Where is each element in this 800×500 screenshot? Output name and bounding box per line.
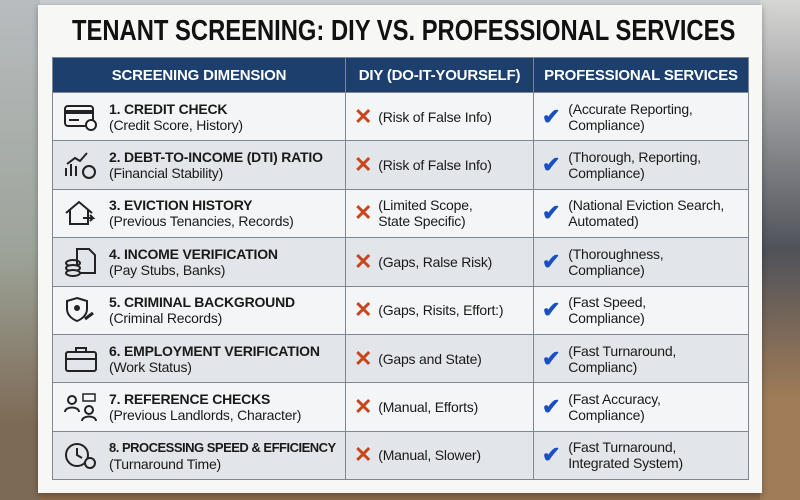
comparison table: Complianc) xyxy=(568,359,637,375)
comparison table xyxy=(52,57,749,480)
comparison table: ✕ xyxy=(354,104,372,129)
comparison table: 4. INCOME VERIFICATION xyxy=(109,246,278,262)
comparison table: (Pay Stubs, Banks) xyxy=(109,262,225,278)
comparison table: PROFESSIONAL SERVICES xyxy=(544,66,738,84)
comparison table: 2. DEBT-TO-INCOME (DTI) RATIO xyxy=(109,149,323,165)
comparison table: ✔ xyxy=(542,200,560,225)
comparison table: Compliance) xyxy=(568,262,645,278)
comparison table: DIY (DO-IT-YOURSELF) xyxy=(359,66,520,84)
comparison table: ✕ xyxy=(354,152,372,177)
comparison table: ✔ xyxy=(542,152,560,177)
comparison table: ✕ xyxy=(354,297,372,322)
comparison table: Compliance) xyxy=(568,165,645,181)
comparison table: 3. EVICTION HISTORY xyxy=(109,197,252,213)
comparison table: (Risk of False Info) xyxy=(378,109,492,125)
comparison table: ✕ xyxy=(354,200,372,225)
comparison table: (Gaps, Risits, Effort:) xyxy=(378,302,503,318)
comparison table: ✔ xyxy=(542,249,560,274)
comparison table: ✕ xyxy=(354,346,372,371)
comparison table: (National Eviction Search, xyxy=(568,197,724,213)
comparison table: ✔ xyxy=(542,297,560,322)
comparison table: Compliance) xyxy=(568,310,645,326)
comparison table: ✕ xyxy=(354,394,372,419)
comparison table: ✕ xyxy=(354,442,372,467)
comparison table: SCREENING DIMENSION xyxy=(112,66,286,84)
comparison table: (Thorough, Reporting, xyxy=(568,149,701,165)
comparison table: (Previous Tenancies, Records) xyxy=(109,213,294,229)
comparison table: ✔ xyxy=(542,394,560,419)
comparison table: (Fast Turnaround, xyxy=(568,343,676,359)
comparison table: (Fast Turnaround, xyxy=(568,439,676,455)
comparison table: 6. EMPLOYMENT VERIFICATION xyxy=(109,343,320,359)
comparison table: State Specific) xyxy=(378,213,466,229)
comparison table: (Fast Speed, xyxy=(568,294,646,310)
comparison table: (Credit Score, History) xyxy=(109,117,243,133)
comparison table: (Work Status) xyxy=(109,359,192,375)
comparison table: ✔ xyxy=(542,442,560,467)
comparison table: ✔ xyxy=(542,104,560,129)
comparison table: ✔ xyxy=(542,346,560,371)
comparison table: ✕ xyxy=(354,249,372,274)
comparison table: (Previous Landlords, Character) xyxy=(109,407,301,423)
comparison table: 8. PROCESSING SPEED & EFFICIENCY xyxy=(109,440,336,455)
comparison table: (Manual, Efforts) xyxy=(378,399,478,415)
comparison table: (Thoroughness, xyxy=(568,246,664,262)
comparison table: (Fast Accuracy, xyxy=(568,391,661,407)
comparison table: (Turnaround Time) xyxy=(109,456,221,472)
comparison table: Automated) xyxy=(568,213,639,229)
title: TENANT SCREENING: DIY VS. PROFESSIONAL SERVICES xyxy=(72,15,735,47)
comparison table: (Limited Scope, xyxy=(378,197,473,213)
comparison table: 7. REFERENCE CHECKS xyxy=(109,391,270,407)
comparison table: Integrated System) xyxy=(568,455,683,471)
comparison table: 5. CRIMINAL BACKGROUND xyxy=(109,294,295,310)
comparison table: (Manual, Slower) xyxy=(378,447,481,463)
comparison table: (Gaps and State) xyxy=(378,351,482,367)
comparison table: Compliance) xyxy=(568,407,645,423)
comparison table: Compliance) xyxy=(568,117,645,133)
comparison table: (Criminal Records) xyxy=(109,310,222,326)
comparison table: (Accurate Reporting, xyxy=(568,101,693,117)
comparison table: (Risk of False Info) xyxy=(378,157,492,173)
comparison table: (Gaps, Ralse Risk) xyxy=(378,254,492,270)
comparison table: (Financial Stability) xyxy=(109,165,223,181)
comparison table: 1. CREDIT CHECK xyxy=(109,101,227,117)
